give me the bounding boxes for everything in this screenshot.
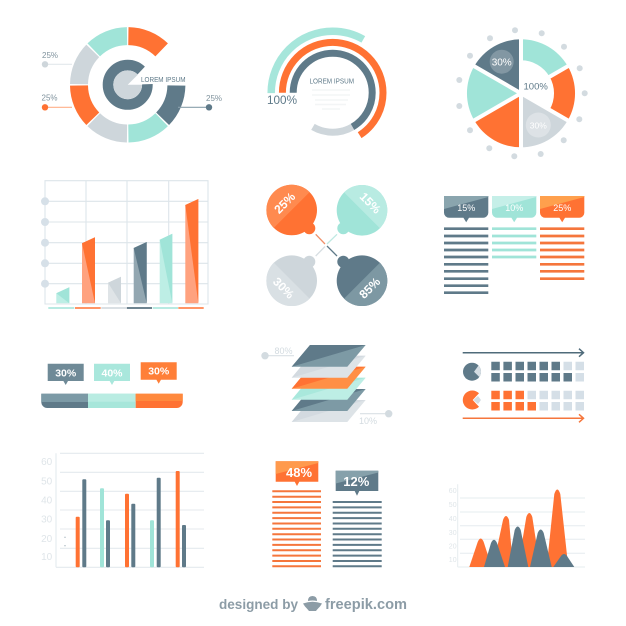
- layer 4: mint: [292, 378, 366, 400]
- y axis labels: 20: [449, 544, 457, 550]
- panel: segmented donut chart: [42, 16, 222, 154]
- faint body text: [312, 90, 350, 109]
- y axis labels: 40: [449, 516, 457, 523]
- line column: orange: [540, 229, 584, 279]
- panel: three tab columns: [444, 196, 584, 293]
- axis dots: [41, 197, 49, 288]
- y axis labels: 10: [449, 557, 457, 564]
- y axis labels: 10: [41, 552, 53, 563]
- callout: 80%: 80%: [274, 346, 293, 356]
- footer credit: freepik.com: [325, 596, 407, 613]
- layer 2: gray: [292, 356, 366, 378]
- gauge arcs: [271, 31, 394, 154]
- layer 5: slate: [292, 389, 366, 411]
- bars: [56, 199, 198, 303]
- y axis labels: 40: [41, 496, 53, 506]
- orange peaks: [469, 490, 568, 567]
- pie icon: orange: [463, 390, 481, 410]
- donut ring segments: [59, 16, 197, 154]
- panel: segmented progress bar: [41, 362, 183, 408]
- tab: mint 10%: [492, 196, 536, 222]
- label: orange 30%: 30%: [148, 366, 170, 378]
- inner ring with wedge cut: [108, 65, 147, 104]
- callout: gray 25%: 25%: [42, 51, 58, 60]
- chart grid: [45, 181, 208, 304]
- tab: orange 25%: 25%: [553, 203, 571, 213]
- panel: pie chart with dots: [456, 27, 588, 159]
- layer 3: orange: [292, 367, 366, 389]
- surrounding dots: [456, 27, 588, 159]
- line column: mint: [492, 229, 536, 257]
- label: mint 40%: 40%: [101, 368, 123, 380]
- y axis labels: [449, 488, 457, 564]
- y axis labels: 50: [41, 476, 53, 488]
- tab: mint 10%: 10%: [505, 203, 523, 213]
- y axis labels: 30: [41, 514, 53, 526]
- stacked bar: [41, 394, 183, 408]
- squares: orange rows: [491, 391, 536, 410]
- arrow: slate: [463, 349, 584, 357]
- gauge title: LOREM IPSUM: [310, 78, 354, 86]
- line column: slate: [444, 229, 488, 293]
- panel: grid bar chart: [41, 181, 208, 308]
- tab: slate 15%: [444, 196, 488, 222]
- squares: slate rows: [491, 362, 572, 382]
- panel: two striped columns: [272, 461, 382, 566]
- layer 6: gray: [292, 400, 366, 422]
- y axis labels: 60: [449, 488, 457, 495]
- slate lines: [333, 502, 382, 566]
- bars: [76, 471, 186, 567]
- y axis labels: 30: [449, 530, 457, 537]
- label: mint 40%: [94, 364, 130, 385]
- highlight: gray 30%: 30%: [530, 120, 547, 130]
- panel: peak area chart: [449, 484, 585, 567]
- panel: grouped bar chart: [41, 453, 204, 567]
- layer 1: slate: [292, 345, 366, 367]
- bubble: mint 15%: 15%: [357, 190, 384, 217]
- bubble: gray 30%: 30%: [270, 275, 297, 302]
- squares: light cells: [528, 362, 584, 410]
- icon: freepik hat: [303, 596, 322, 611]
- label: orange 48%: 48%: [286, 465, 312, 480]
- y axis labels: [41, 457, 53, 563]
- bubble: slate 85%: 85%: [356, 274, 383, 302]
- connector lines: [316, 234, 337, 256]
- callout: orange 25%: [42, 94, 72, 111]
- chart grid: [458, 484, 585, 567]
- panel: pictogram squares: [463, 349, 584, 422]
- small marks: [64, 537, 66, 546]
- y axis labels: 50: [449, 502, 457, 509]
- y axis labels: 60: [41, 457, 53, 468]
- callout: slate 25%: 25%: [206, 94, 222, 103]
- pie wedges: [467, 35, 575, 152]
- pie center value: 100%: [524, 82, 548, 93]
- label: orange 30%: [141, 362, 177, 384]
- label: slate 30%: 30%: [55, 368, 77, 380]
- highlight: slate 30%: 30%: [492, 58, 512, 68]
- callout: 10%: 10%: [359, 416, 377, 426]
- callout: orange 25%: 25%: [42, 94, 58, 102]
- footer credit: designed by: [219, 597, 298, 612]
- label: slate 12%: 12%: [343, 474, 370, 489]
- slate peaks: [484, 526, 574, 567]
- footer credit: [219, 596, 407, 613]
- arrow: orange: [463, 414, 584, 422]
- gauge value: 100%: [267, 93, 297, 107]
- panel: stacked layers: [261, 345, 392, 426]
- y axis labels: 20: [41, 534, 53, 545]
- label: slate 30%: [48, 364, 84, 385]
- tab: orange 25%: [540, 196, 584, 222]
- panel: four bubbles: [266, 185, 387, 306]
- callout: slate 25%: [178, 94, 222, 111]
- callout: gray 25%: [42, 51, 72, 68]
- center label: LOREM IPSUM: [141, 77, 186, 84]
- pie icon: slate: [463, 363, 481, 381]
- color legend strip: [48, 307, 204, 309]
- orange lines: [272, 491, 321, 566]
- bubble: orange 25%: 25%: [271, 189, 298, 217]
- panel: concentric arc gauge: [267, 31, 394, 154]
- tab: slate 15%: 15%: [457, 203, 475, 213]
- chart grid: [56, 453, 204, 567]
